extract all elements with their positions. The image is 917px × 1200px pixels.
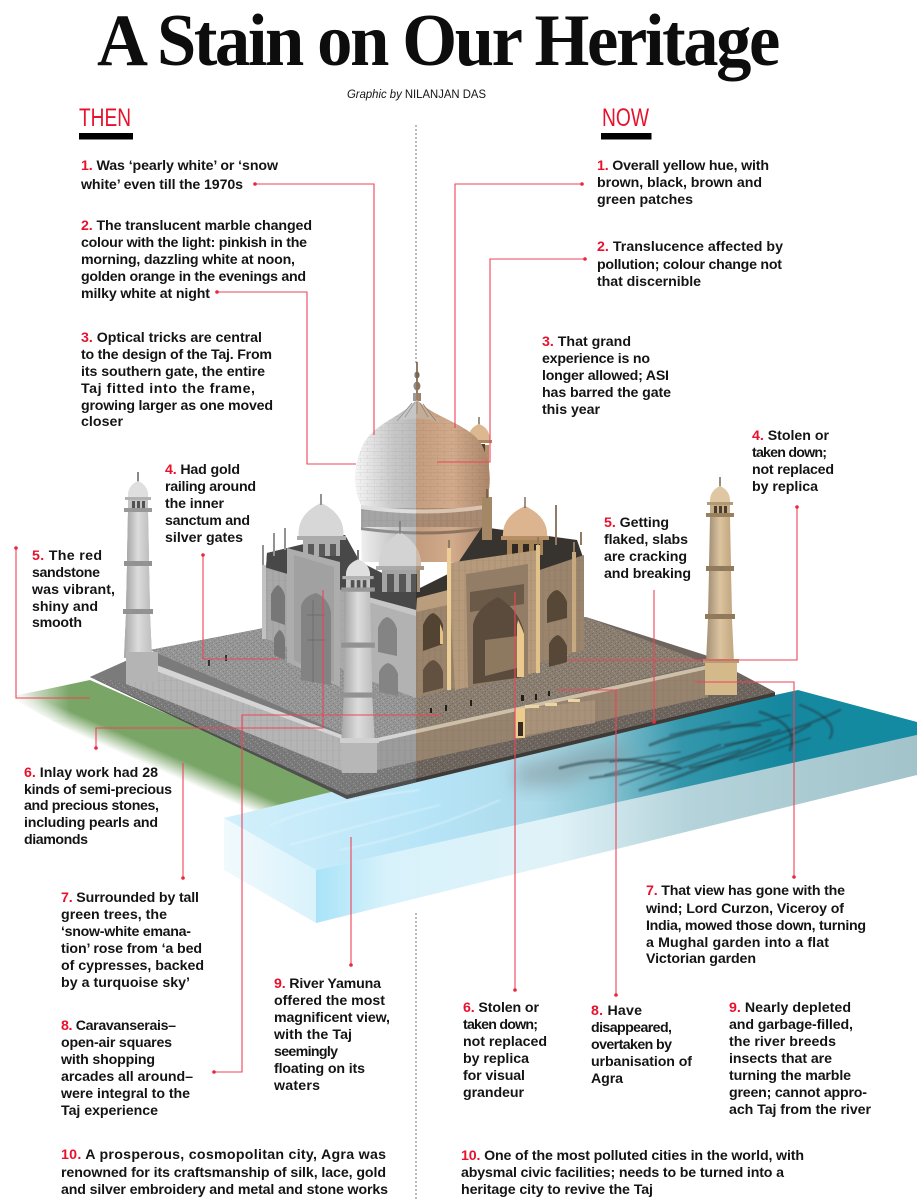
- now 3 text: experience is no: [542, 351, 650, 367]
- then 1 text: 1. Was ‘pearly white’ or ‘snow: [81, 158, 279, 174]
- then 9 text: seemingly: [274, 1044, 338, 1060]
- now 1 text: 1. Overall yellow hue, with: [597, 158, 769, 174]
- now 4 text: 4. Stolen or: [752, 428, 829, 444]
- now 6 text: for visual: [463, 1068, 525, 1084]
- then 4 text: railing around: [165, 479, 256, 495]
- then 4 text: sanctum and: [165, 513, 250, 529]
- now 7 text: 7. That view has gone with the: [646, 883, 845, 899]
- then 7 text: by a turquoise sky’: [61, 975, 190, 991]
- then 8 text: Taj experience: [61, 1103, 158, 1119]
- then 5 text: sandstone: [32, 565, 100, 581]
- then 2 text: [81, 218, 312, 302]
- then 9 text: 9. River Yamuna: [274, 976, 381, 992]
- then 8 text: open-air squares: [61, 1035, 172, 1051]
- now 5 text: [604, 515, 691, 582]
- then 5 text: was vibrant,: [31, 582, 115, 598]
- then 3 text: to the design of the Taj. From: [81, 347, 272, 363]
- title: A Stain on Our Heritage: [97, 0, 779, 82]
- byline: Graphic by NILANJAN DAS: [347, 89, 486, 101]
- now 3 text: this year: [542, 402, 600, 418]
- then 4 text: [165, 462, 256, 546]
- then 7 text: green trees, the: [61, 907, 167, 923]
- now 8 text: overtaken by: [591, 1037, 672, 1053]
- now 6 text: grandeur: [463, 1085, 524, 1101]
- now 2 text: that discernible: [597, 274, 701, 290]
- now 2 text: [597, 239, 783, 290]
- now 3 text: [542, 334, 671, 418]
- then 4 text: 4. Had gold: [165, 462, 240, 478]
- then 10 text: and silver embroidery and metal and stone works: [61, 1182, 388, 1198]
- river pollution streaks: [560, 705, 840, 790]
- now 3 text: longer allowed; ASI: [542, 368, 669, 384]
- connector: now 1: [455, 182, 584, 428]
- then 6 text: diamonds: [24, 832, 88, 848]
- now 2 text: pollution; colour change not: [597, 257, 782, 273]
- then 9 text: magnificent view,: [274, 1010, 390, 1026]
- then 3 text: 3. Optical tricks are central: [81, 330, 262, 346]
- now 6 text: not replaced: [463, 1034, 547, 1050]
- then 7 text: 7. Surrounded by tall: [61, 890, 199, 906]
- now 1 text: [597, 158, 769, 208]
- now 8 text: [591, 1003, 692, 1087]
- now 8 text: Agra: [591, 1071, 623, 1087]
- then 9 text: waters: [273, 1078, 320, 1094]
- then 4 text: silver gates: [165, 530, 243, 546]
- then 6 text: kinds of semi-precious: [24, 782, 172, 798]
- connector: then 4: [201, 553, 280, 659]
- then 2 text: morning, dazzling white at noon,: [81, 252, 295, 268]
- then 7 text: of cypresses, backed: [61, 958, 204, 974]
- heading: now: NOW: [602, 104, 649, 132]
- now 6 text: [463, 1000, 547, 1101]
- then 3 text: [81, 330, 273, 430]
- now 8 text: urbanisation of: [591, 1054, 692, 1070]
- then 9 text: with the Taj: [273, 1027, 352, 1043]
- then 10 text: 10. A prosperous, cosmopolitan city, Agra was: [61, 1147, 386, 1163]
- now 10 text: abysmal civic facilities; needs to be turned into a: [461, 1165, 784, 1181]
- center divider upper: [415, 125, 417, 363]
- connector: now 7: [695, 682, 796, 879]
- connector: then 2 and 3: [215, 290, 356, 464]
- now 4 text: taken down;: [752, 445, 827, 461]
- now 4 text: [752, 428, 834, 495]
- connector: now 8: [558, 690, 618, 997]
- now 4 text: by replica: [752, 479, 818, 495]
- now 9 text: green; cannot appro-: [729, 1085, 867, 1101]
- heading: then: [79, 104, 133, 140]
- now 5 text: 5. Getting: [604, 515, 669, 531]
- now 9 text: insects that are: [729, 1051, 832, 1067]
- center divider lower: [415, 913, 417, 1200]
- then 5 text: smooth: [32, 615, 82, 631]
- then 8 text: [60, 1018, 193, 1119]
- now 5 text: are cracking: [604, 549, 687, 565]
- now 7 text: Victorian garden: [646, 951, 756, 967]
- then 4 text: the inner: [165, 496, 224, 512]
- now 9 text: [729, 1000, 871, 1118]
- connector: then 1: [253, 182, 374, 435]
- connector: then 8: [212, 715, 441, 1074]
- then 6 text: [24, 765, 172, 848]
- connector: now 2: [437, 257, 587, 462]
- then 9 text: floating on its: [274, 1061, 365, 1077]
- then 2 text: 2. The translucent marble changed: [81, 218, 312, 234]
- now 9 text: turning the marble: [729, 1068, 851, 1084]
- heading: now: [601, 104, 652, 140]
- connector: then 9: [349, 837, 353, 967]
- now 9 text: and garbage-filled,: [729, 1017, 853, 1033]
- now 1 text: brown, black, brown and: [597, 175, 762, 191]
- now 6 text: by replica: [463, 1051, 529, 1067]
- now 9 text: ach Taj from the river: [729, 1102, 871, 1118]
- now 4 text: not replaced: [752, 462, 834, 478]
- now 6 text: 6. Stolen or: [463, 1000, 539, 1016]
- then 6 text: including pearls and: [24, 815, 158, 831]
- then 8 text: were integral to the: [60, 1086, 190, 1102]
- then 7 text: [61, 890, 204, 991]
- then 3 text: growing larger as one moved: [81, 398, 273, 414]
- then 3 text: Taj fitted into the frame,: [81, 381, 255, 397]
- now 9 text: the river breeds: [729, 1034, 836, 1050]
- then 10 text: renowned for its craftsmanship of silk, lace, gold: [61, 1165, 386, 1181]
- now 8 text: 8. Have: [591, 1003, 642, 1019]
- connector: then 5: [14, 546, 90, 698]
- now 1 text: green patches: [597, 192, 693, 208]
- now 7 text: India, mowed those down, turning: [646, 918, 866, 934]
- connector: now 6: [513, 592, 517, 992]
- now 9 text: 9. Nearly depleted: [729, 1000, 851, 1016]
- then 8 text: with shopping: [60, 1052, 155, 1068]
- then 9 text: [273, 976, 390, 1094]
- then 1 text: white’ even till the 1970s: [80, 177, 243, 193]
- now 10 text: heritage city to revive the Taj: [461, 1182, 653, 1198]
- then 2 text: golden orange in the evenings and: [81, 269, 306, 285]
- then 8 text: 8. Caravanserais–: [61, 1018, 176, 1034]
- then 6 text: and precious stones,: [24, 798, 159, 814]
- then 6 text: 6. Inlay work had 28: [24, 765, 158, 781]
- heading: then: THEN: [79, 104, 131, 132]
- then 2 text: milky white at night: [81, 286, 210, 302]
- now 7 text: a Mughal garden into a flat: [646, 935, 829, 951]
- connector: now 5: [652, 590, 656, 724]
- then 9 text: offered the most: [274, 993, 385, 1009]
- then 3 text: closer: [81, 414, 123, 430]
- now 5 text: and breaking: [604, 566, 691, 582]
- then 7 text: tion’ rose from ‘a bed: [61, 941, 202, 957]
- now 3 text: has barred the gate: [542, 385, 671, 401]
- then 3 text: its southern gate, the entire: [81, 364, 265, 380]
- now 6 text: taken down;: [463, 1017, 538, 1033]
- then 5 text: [31, 548, 115, 631]
- now 5 text: flaked, slabs: [604, 532, 688, 548]
- river Yamuna water slab: [224, 690, 917, 923]
- illustration: Taj Mahal, then half in white: [90, 372, 416, 799]
- now 10 text: [461, 1148, 804, 1198]
- then 7 text: ‘snow-white emana-: [61, 924, 191, 940]
- then 8 text: arcades all around–: [61, 1069, 193, 1085]
- then 10 text: [61, 1147, 388, 1198]
- now 7 text: wind; Lord Curzon, Viceroy of: [645, 901, 844, 917]
- connector: now 4: [567, 505, 799, 660]
- then 2 text: colour with the light: pinkish in the: [81, 235, 307, 251]
- now 8 text: disappeared,: [591, 1020, 672, 1036]
- green lawn: [10, 680, 345, 818]
- connector: then 7: [181, 763, 185, 880]
- then 5 text: shiny and: [32, 599, 98, 615]
- illustration: Taj Mahal, now half in colour: [90, 362, 775, 799]
- now 7 text: [645, 883, 866, 967]
- then 1 text: [80, 158, 279, 193]
- then 5 text: 5. The red: [32, 548, 102, 564]
- connector: then 6: [94, 590, 323, 750]
- now 3 text: 3. That grand: [542, 334, 631, 350]
- now 2 text: 2. Translucence affected by: [597, 239, 783, 255]
- now 10 text: 10. One of the most polluted cities in the world, with: [461, 1148, 804, 1164]
